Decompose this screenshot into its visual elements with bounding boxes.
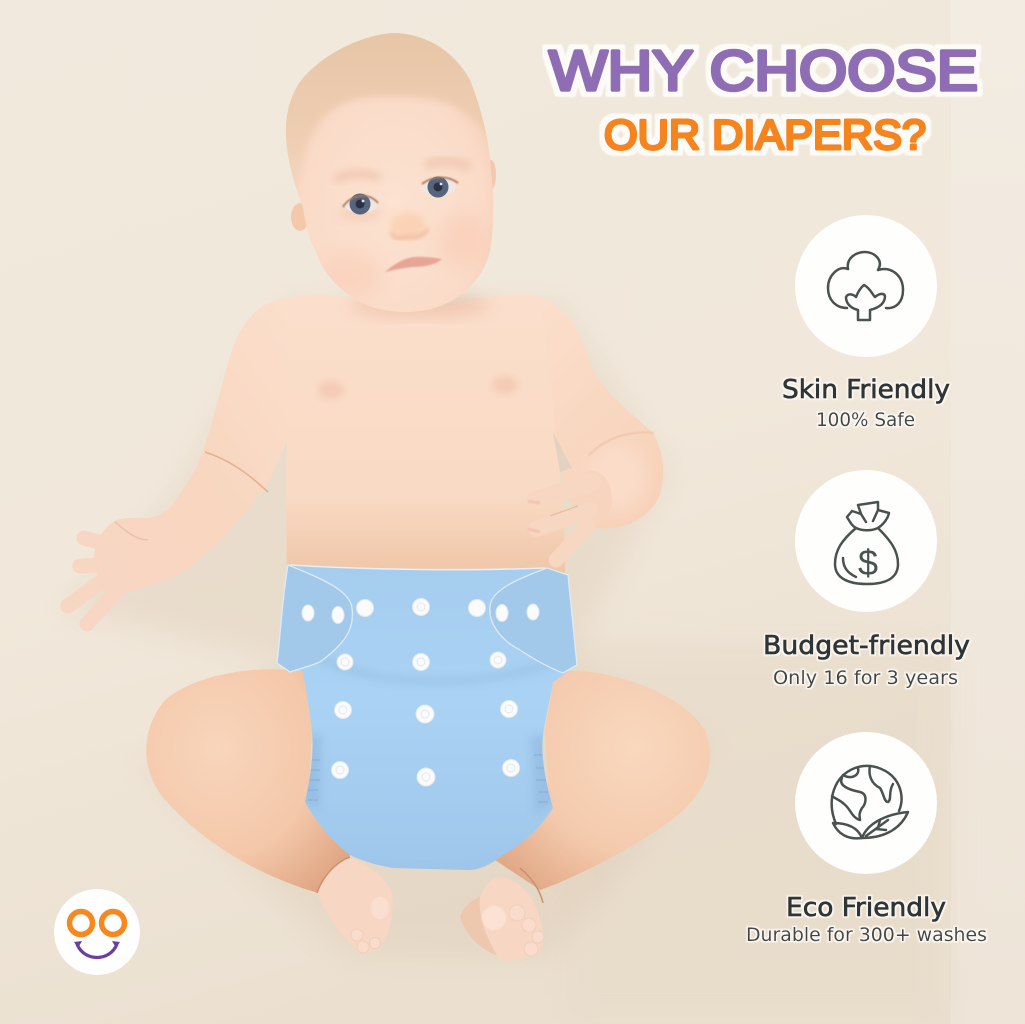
feature: skin friendly bbox=[782, 215, 950, 431]
feature: budget friendly bbox=[763, 470, 970, 689]
left arm and hand bbox=[68, 298, 292, 624]
icon: money bag: $ bbox=[858, 542, 878, 583]
right eye bbox=[422, 176, 458, 198]
label: Skin Friendly bbox=[782, 375, 950, 405]
snap buttons bbox=[302, 598, 539, 786]
logo: smiley bbox=[54, 889, 140, 975]
right hand resting on belly bbox=[528, 471, 612, 560]
title line 1: WHY CHOOSE bbox=[549, 39, 978, 103]
head bbox=[286, 33, 496, 312]
hair bbox=[286, 33, 486, 176]
icon: cotton boll bbox=[828, 252, 903, 320]
baby photo illustration bbox=[60, 20, 715, 961]
sublabel: Durable for 300+ washes bbox=[746, 924, 987, 946]
label: Eco Friendly bbox=[786, 893, 946, 923]
sublabel: 100% Safe bbox=[816, 409, 915, 431]
left leg bbox=[146, 669, 350, 895]
right leg bbox=[495, 671, 710, 890]
ears bbox=[291, 203, 309, 231]
torso bbox=[286, 293, 572, 575]
waistband edge bbox=[290, 565, 545, 570]
label: Budget-friendly bbox=[763, 631, 970, 661]
soft shadow under baby bbox=[60, 300, 715, 960]
icon: globe with leaves bbox=[832, 766, 908, 838]
left eye bbox=[343, 194, 378, 214]
diaper bbox=[277, 565, 577, 880]
feature: eco friendly bbox=[746, 732, 987, 946]
sublabel: Only 16 for 3 years bbox=[773, 667, 958, 689]
left tab bbox=[277, 565, 352, 672]
nose bbox=[390, 212, 428, 240]
right foot bbox=[460, 868, 544, 961]
mouth bbox=[385, 257, 442, 272]
right arm bbox=[538, 296, 663, 528]
left foot bbox=[317, 857, 393, 953]
title bbox=[549, 39, 978, 158]
right tab bbox=[490, 568, 577, 673]
icon: money bag bbox=[835, 502, 898, 584]
elastic leg gathers bbox=[305, 735, 552, 809]
title line 2: OUR DIAPERS? bbox=[604, 111, 926, 158]
